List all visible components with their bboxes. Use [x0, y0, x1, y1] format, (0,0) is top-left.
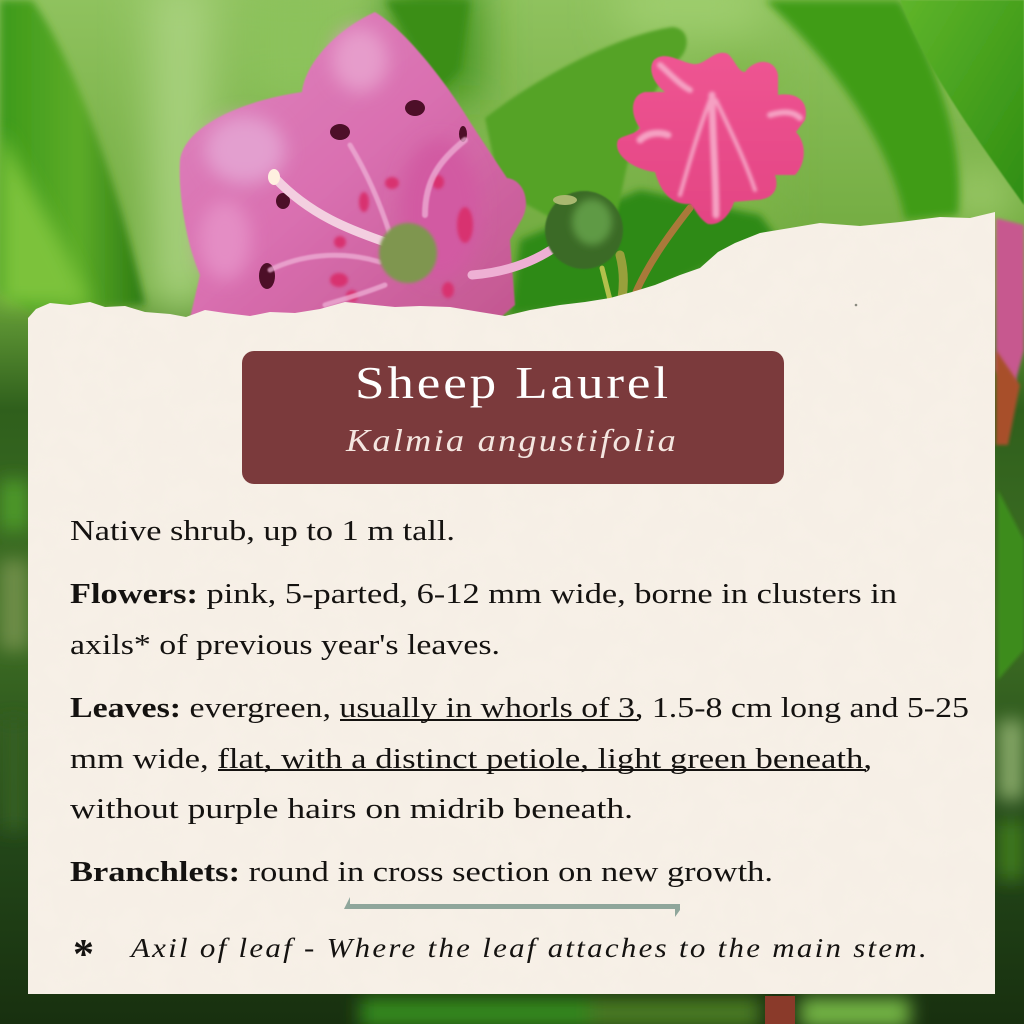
heading: common name: Sheep Laurel: [355, 357, 671, 408]
intro line: Native shrub, up to 1 m tall.: [70, 515, 455, 547]
icon: right edge leaf: [900, 0, 1024, 205]
flowers paragraph: Flowers: pink, 5-parted, 6-12 mm wide, borne in clusters in: [70, 578, 898, 610]
icon: left foreground leaf: [0, 0, 145, 310]
flowers paragraph: [70, 578, 898, 661]
leaves paragraph: [70, 692, 969, 825]
icon: asterisk: *: [73, 932, 94, 978]
footnote: [73, 932, 929, 978]
footnote text: Axil of leaf - Where the leaf attaches to the main stem.: [129, 933, 929, 963]
leaves paragraph: mm wide, flat, with a distinct petiole, light green beneath,: [70, 743, 872, 775]
text block: description: [70, 515, 969, 888]
flower centre: [379, 223, 437, 283]
leaves paragraph: without purple hairs on midrib beneath.: [70, 793, 633, 825]
icon: pink flower bud: [617, 53, 806, 224]
stamen: [275, 178, 388, 243]
panel: torn paper card: [28, 212, 995, 994]
subheading: scientific name: Kalmia angustifolia: [345, 422, 678, 458]
petal spots: [259, 100, 467, 289]
flowers paragraph: axils* of previous year's leaves.: [70, 629, 500, 661]
leaves paragraph: Leaves: evergreen, usually in whorls of 3, 1.5-8 cm long and 5-25: [70, 692, 969, 724]
icon: green seed pod: [545, 191, 623, 269]
icon: upper right leaf: [765, 0, 959, 220]
branchlets paragraph: Branchlets: round in cross section on new growth.: [70, 856, 773, 888]
sunlit highlights on petals: [199, 28, 480, 280]
icon: stems: [602, 208, 690, 300]
title banner: [242, 351, 784, 484]
icon: large leaf behind bud: [485, 27, 687, 250]
pistil to seed pod: [472, 240, 565, 275]
arrow: double-ended hook line: [344, 897, 680, 917]
icon: pink flower: [180, 12, 565, 318]
